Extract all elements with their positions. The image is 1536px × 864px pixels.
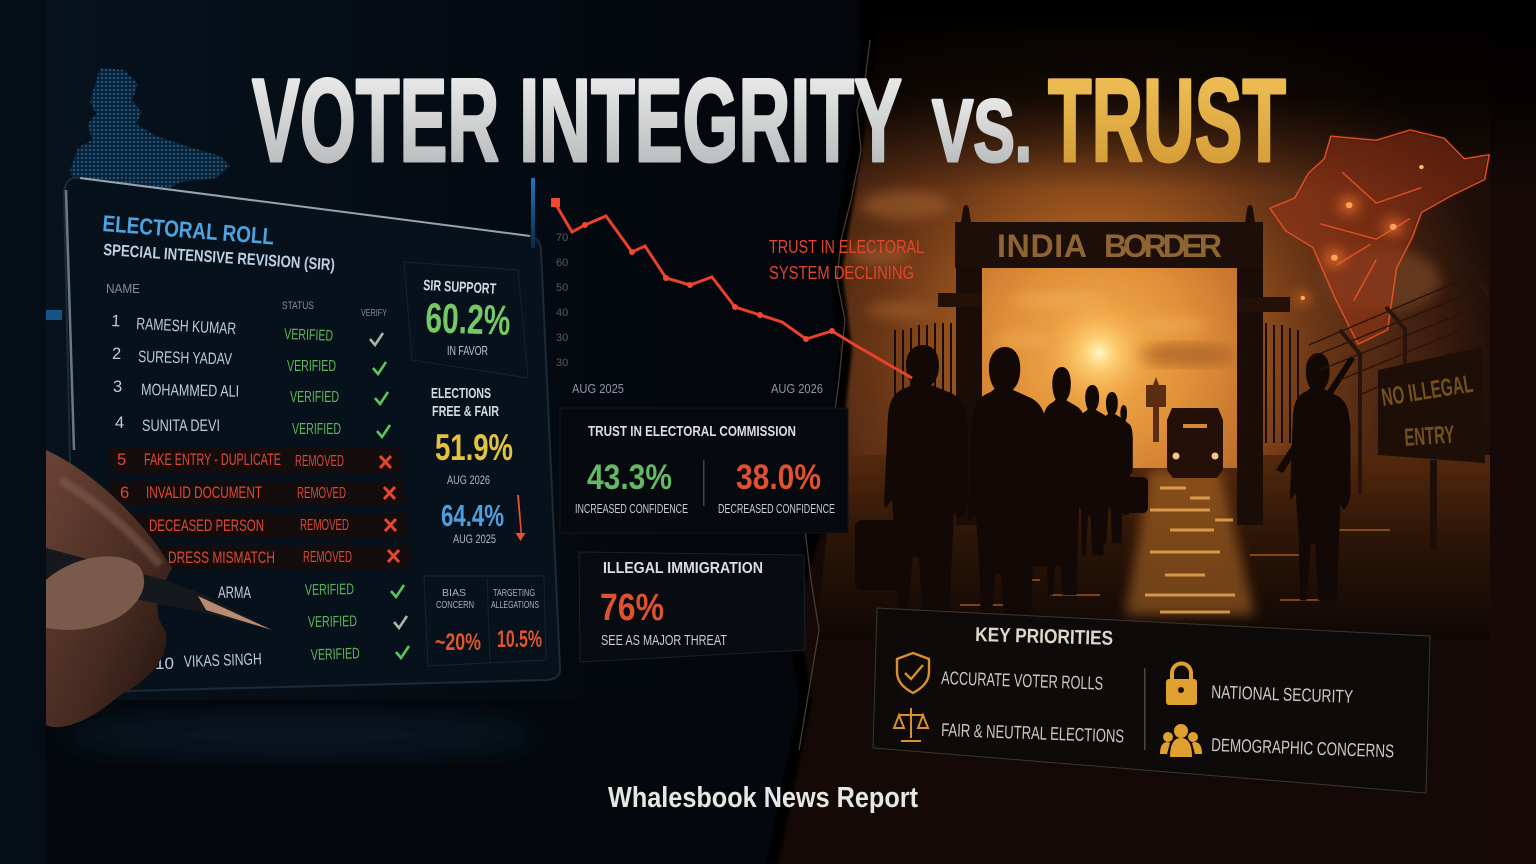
line chart: trust declining: 30 (556, 357, 568, 369)
panel: key priorities (873, 608, 1430, 793)
table rows: MOHAMMED ALI (141, 381, 239, 401)
table rows: DRESS MISMATCH (168, 549, 275, 567)
stat: bias and targeting: CONCERN (436, 599, 474, 611)
table rows: 2 (112, 345, 121, 363)
panel: illegal immigration: ILLEGAL IMMIGRATION (603, 560, 763, 577)
stat: bias and targeting: 10.5% (497, 626, 542, 653)
line chart: trust declining: 30 (556, 332, 568, 344)
footer credit: Whalesbook News Report (608, 782, 918, 814)
panel: illegal immigration (579, 552, 805, 662)
stat: SIR support: 60.2% (425, 294, 511, 344)
chart label: trust in electoral system declining (769, 237, 924, 283)
table rows: REMOVED (300, 517, 349, 534)
title: TRUST (1048, 55, 1286, 187)
priority: accurate voter rolls: ACCURATE VOTER ROLLS (941, 667, 1103, 694)
background: left dark digital side (0, 0, 880, 864)
line chart: trust declining: AUG 2025 (572, 381, 624, 396)
sign: no illegal entry: NO ILLEGAL (1380, 370, 1475, 412)
tablet: electoral roll (64, 178, 560, 692)
table rows: 1 (111, 312, 121, 330)
table rows: REMOVED (297, 485, 346, 502)
icon: shield check (897, 653, 929, 693)
sign: no illegal entry: ENTRY (1403, 421, 1455, 452)
table rows: REMOVED (295, 453, 344, 470)
stat: bias and targeting: ~20% (435, 629, 481, 656)
chart label: trust in electoral system declining: TRUST IN ELECTORAL (769, 237, 924, 257)
panel: trust in electoral commission: 38.0% (736, 458, 821, 497)
stat: elections free and fair: 64.4% (441, 498, 504, 533)
silhouettes: people walking (855, 345, 1148, 641)
table rows: 10 (155, 654, 174, 673)
map: glowing red India on right (1270, 130, 1489, 344)
line chart: trust declining: 50 (556, 282, 568, 294)
panel: trust in electoral commission: INCREASED CONFIDENCE (575, 501, 688, 516)
line chart: trust declining: 40 (556, 307, 568, 319)
table rows: VERIFIED (308, 613, 357, 631)
table rows: INVALID DOCUMENT (146, 484, 262, 502)
line chart: trust declining: 60 (556, 257, 568, 269)
table rows: 4 (115, 414, 124, 432)
stat: bias and targeting: ALLEGATIONS (491, 599, 539, 611)
panel: illegal immigration: SEE AS MAJOR THREAT (601, 632, 727, 649)
table rows: RAMESH KUMAR (136, 315, 237, 338)
border gate: India Border: BORDER (1104, 228, 1222, 264)
arrow: decline (516, 495, 526, 541)
table rows: ARMA (218, 584, 251, 602)
table rows: 6 (120, 484, 129, 502)
stat: SIR support: SIR SUPPORT (423, 277, 497, 298)
table rows: VERIFIED (290, 389, 339, 406)
table rows: VERIFIED (287, 358, 336, 375)
stat: bias and targeting: BIAS (442, 587, 466, 599)
torn paper edge divider (772, 30, 872, 864)
table rows: FAKE ENTRY - DUPLICATE (144, 451, 281, 469)
barbed wire fence (1309, 265, 1490, 494)
map: India dotted on left (70, 68, 230, 194)
panel: trust in electoral commission: 43.3% (587, 458, 672, 497)
icon: people group (1160, 724, 1202, 757)
table rows: SUNITA DEVI (142, 417, 220, 435)
panel: trust in electoral commission: TRUST IN ELECTORAL COMMISSION (588, 423, 796, 440)
table rows: VERIFIED (311, 645, 360, 664)
stat: bias and targeting (424, 576, 546, 666)
stat: elections free and fair: FREE & FAIR (432, 403, 499, 420)
sign: no illegal entry (1378, 347, 1485, 550)
line chart: trust declining (531, 178, 912, 396)
panel: key priorities: KEY PRIORITIES (975, 624, 1113, 650)
table header: STATUS (282, 300, 314, 312)
stat: elections free and fair: 51.9% (435, 427, 513, 468)
border gate: India Border (895, 205, 1298, 525)
truck on the road (1167, 408, 1223, 478)
icon: scales of justice (894, 708, 928, 741)
title: VS. (932, 81, 1032, 180)
hand holding pen (46, 450, 272, 727)
table rows: VERIFIED (305, 581, 354, 599)
table rows: VIKAS SINGH (184, 650, 262, 671)
title: VOTER INTEGRITY (252, 55, 902, 187)
line chart: trust declining: 70 (556, 232, 568, 244)
priority: national security: NATIONAL SECURITY (1211, 681, 1354, 707)
panel: trust in electoral commission (560, 408, 848, 533)
table header (106, 281, 387, 319)
table rows: SURESH YADAV (138, 348, 232, 368)
border gate: India Border: INDIA (997, 228, 1087, 264)
icon: padlock (1166, 664, 1197, 705)
line chart: trust declining: AUG 2026 (771, 381, 823, 396)
priority: demographic concerns: DEMOGRAPHIC CONCERNS (1211, 734, 1394, 761)
table header: NAME (106, 281, 140, 296)
priority: fair and neutral elections: FAIR & NEUTRAL ELECTIONS (941, 719, 1124, 746)
tablet heading: SPECIAL INTENSIVE REVISION (SIR) (103, 241, 335, 274)
stat: elections free and fair: AUG 2026 (447, 473, 490, 487)
background: right sunset border scene (772, 0, 1536, 864)
panel: trust in electoral commission: DECREASED CONFIDENCE (718, 501, 835, 516)
tablet heading: ELECTORAL ROLL (102, 210, 275, 249)
table rows: REMOVED (303, 549, 352, 566)
stat: SIR support (404, 262, 528, 378)
table rows: DECEASED PERSON (149, 517, 264, 535)
tablet heading (102, 210, 335, 274)
table rows (111, 312, 409, 673)
table header: VERIFY (361, 308, 387, 319)
stat: bias and targeting: TARGETING (493, 587, 535, 599)
table rows: 5 (117, 451, 126, 469)
soldier silhouette with rifle (1276, 353, 1355, 600)
stat: SIR support: IN FAVOR (447, 343, 488, 358)
table rows: VERIFIED (292, 421, 341, 438)
stat: elections free and fair: ELECTIONS (431, 385, 491, 402)
table rows: VERIFIED (284, 326, 333, 345)
table rows: 3 (113, 378, 122, 396)
panel: illegal immigration: 76% (600, 587, 664, 629)
chart label: trust in electoral system declining: SYSTEM DECLINING (769, 263, 914, 283)
stat: elections free and fair: AUG 2025 (453, 532, 496, 546)
stat: elections free and fair (431, 385, 526, 546)
